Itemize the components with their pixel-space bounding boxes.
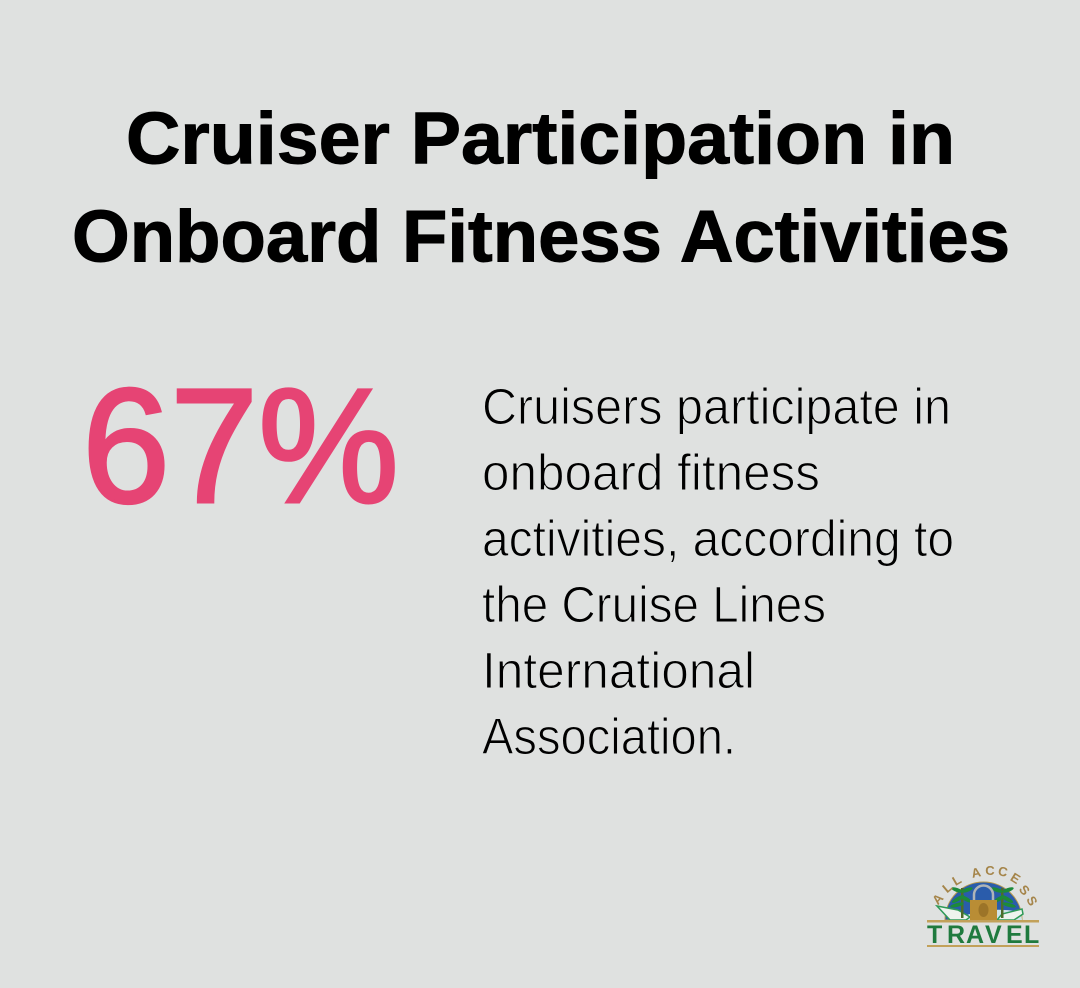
title: Cruiser Participation in: [126, 98, 955, 180]
logo arc lettering: L: [939, 879, 955, 896]
logo arc lettering: [929, 863, 1041, 909]
logo arc lettering: S: [1016, 882, 1033, 899]
description text: Cruisers participate in: [482, 378, 951, 435]
title: [72, 98, 1010, 278]
logo globe dome: [945, 882, 1022, 920]
statistic: 67%: 67%: [82, 354, 399, 537]
description text: International: [482, 642, 755, 699]
description text: Association.: [482, 708, 736, 765]
logo arc lettering: S: [1023, 894, 1041, 909]
logo arc lettering: C: [997, 863, 1010, 880]
logo top rule: [927, 920, 1039, 922]
logo arc lettering: A: [929, 890, 947, 907]
logo wordmark: TRAVEL: [927, 921, 1039, 949]
description text: [482, 378, 954, 765]
logo padlock: [974, 886, 993, 902]
logo: All Access Travel: [927, 863, 1041, 949]
description text: activities, according to: [482, 510, 954, 567]
title: Onboard Fitness Activities: [72, 196, 1010, 278]
logo arc lettering: L: [950, 872, 964, 889]
description text: onboard fitness: [482, 444, 820, 501]
logo boats: [937, 906, 970, 920]
description text: the Cruise Lines: [482, 576, 826, 633]
logo arc lettering: C: [985, 863, 995, 878]
logo bottom rule: [927, 945, 1039, 947]
logo arc lettering: E: [1008, 870, 1023, 887]
logo arc lettering: A: [970, 864, 983, 881]
logo palm trees: [950, 886, 1016, 918]
